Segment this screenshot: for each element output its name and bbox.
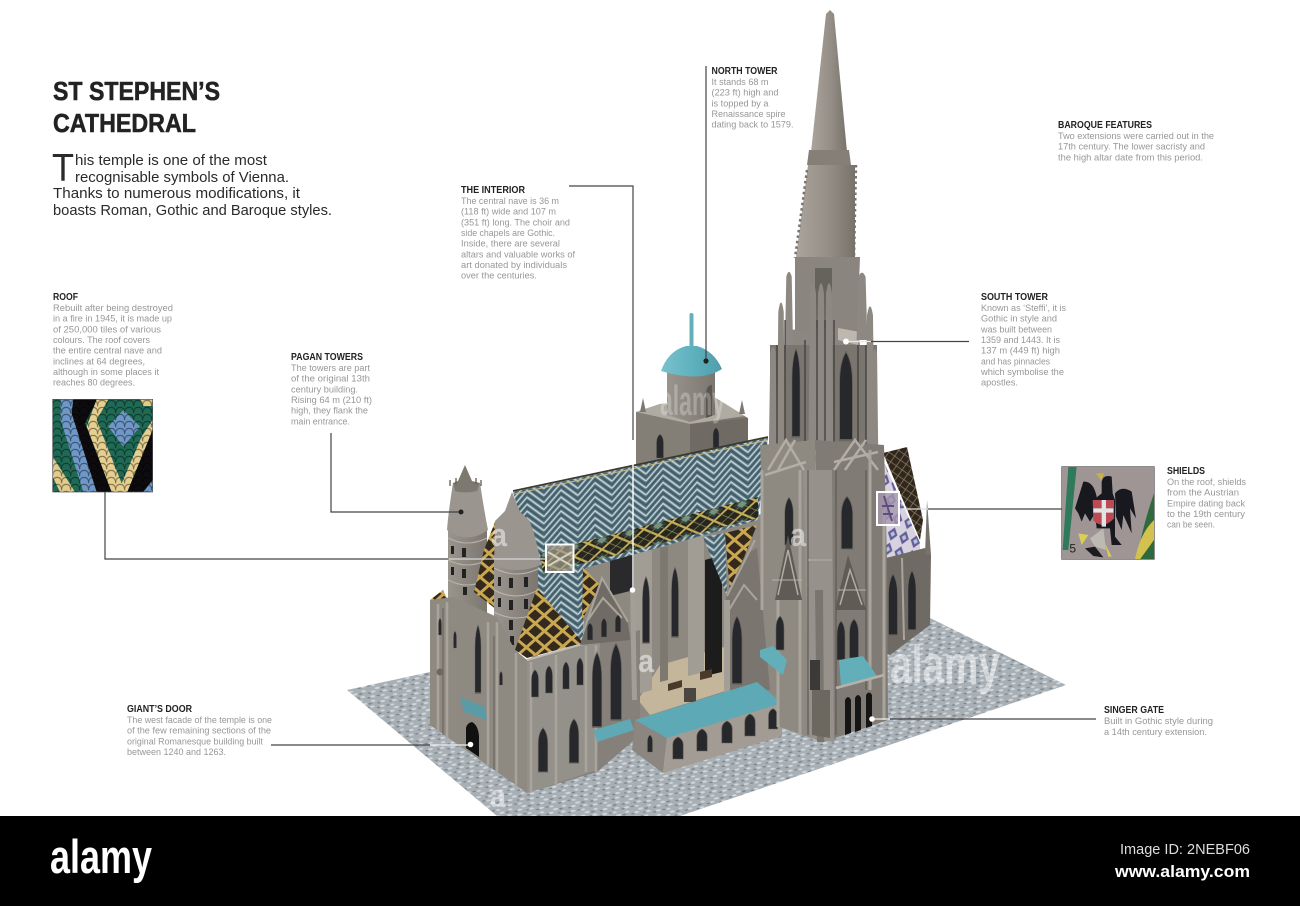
sacristy: [632, 682, 782, 773]
belfry stage: [770, 345, 877, 450]
callout: pagan towers: of the original 13th: [291, 374, 370, 385]
callout: south tower: 1359 and 1443. It is: [981, 335, 1060, 346]
callout: shields: Empire dating back: [1167, 498, 1245, 509]
footer bar: Image ID: 2NEBF06: [1120, 841, 1250, 858]
leader: roof inside building: [449, 558, 546, 560]
callout: pagan towers: [291, 352, 372, 427]
callout: north tower: is topped by a: [712, 98, 769, 109]
pagan towers: [430, 465, 541, 660]
side buttresses: [762, 450, 884, 735]
callout: pagan towers: high, they flank the: [291, 406, 368, 417]
north tower with dome: [636, 313, 748, 472]
intro text with drop cap: boasts Roman, Gothic and Baroque styles.: [53, 202, 332, 219]
callout: roof: the entire central nave and: [53, 346, 162, 357]
intro text with drop cap: [52, 147, 332, 219]
callout: singer gate: a 14th century extension.: [1104, 727, 1207, 738]
roof between towers: [474, 522, 497, 610]
roof leader line: [105, 492, 546, 559]
leader: singer gate: [869, 716, 1096, 722]
callout: roof: ROOF: [53, 292, 78, 303]
south aisle wall: [527, 630, 640, 793]
roof tile swatch: [53, 399, 153, 492]
south tower and spire: [760, 10, 888, 742]
callout: roof: reaches 80 degrees.: [53, 378, 135, 389]
callout: the interior: THE INTERIOR: [461, 185, 526, 196]
yellow lattice roof triangle: [515, 588, 583, 658]
lower tower left face: [760, 440, 823, 742]
callout: giant's door: of the few remaining sections of the: [127, 726, 271, 737]
blue side roofs: [760, 646, 787, 675]
callout: shields: SHIELDS: [1167, 466, 1205, 477]
title: CATHEDRAL: [53, 108, 196, 138]
callout: roof: of 250,000 tiles of various: [53, 324, 161, 335]
callout: roof: inclines at 64 degrees,: [53, 356, 145, 367]
callout: roof: colours. The roof covers: [53, 335, 150, 346]
callout: giant's door: original Romanesque building built: [127, 736, 263, 747]
callout: north tower: (223 ft) high and: [712, 88, 778, 99]
leader: the interior: [569, 186, 635, 593]
callout: south tower: and has pinnacles: [981, 356, 1050, 367]
upper octagon stage: [795, 257, 860, 335]
callout: pagan towers: The towers are part: [291, 363, 370, 374]
callout: north tower: It stands 68 m: [712, 77, 768, 88]
callout: north tower: [712, 66, 794, 131]
tower windows: [785, 497, 793, 545]
callout: pagan towers: PAGAN TOWERS: [291, 352, 363, 363]
callout: north tower: dating back to 1579.: [712, 120, 794, 131]
central buttress: [803, 470, 834, 742]
leader: shields: [928, 508, 1062, 510]
right side gable: [724, 540, 770, 700]
choir gable: [580, 577, 637, 700]
illustration: cathedral: [430, 10, 931, 793]
callout: the interior: Inside, there are several: [461, 239, 560, 250]
footer bar: www.alamy.com: [1114, 862, 1250, 881]
callout: baroque features: the high altar date from this period.: [1058, 152, 1203, 163]
leader: south tower: [843, 338, 969, 344]
callout: singer gate: SINGER GATE: [1104, 705, 1164, 716]
pinnacles: [769, 272, 878, 445]
callout: shields: from the Austrian: [1167, 488, 1239, 499]
callout: roof: [53, 292, 173, 389]
callout: shields: can be seen.: [1167, 520, 1215, 531]
callout: south tower: [980, 292, 1066, 389]
callout: north tower: NORTH TOWER: [712, 66, 778, 77]
callout: the interior: [461, 185, 575, 282]
white detail box: roof: [546, 544, 574, 572]
right pagan tower: [494, 492, 541, 660]
footer bar: alamy: [50, 830, 152, 883]
callout: shields: to the 19th century: [1167, 509, 1245, 520]
callout: shields: [1167, 466, 1246, 531]
callout: the interior: (118 ft) wide and 107 m: [461, 207, 556, 218]
callout: north tower: Renaissance spire: [712, 109, 786, 120]
callout: giant's door: GIANT’S DOOR: [127, 704, 193, 715]
callout: pagan towers: century building.: [291, 384, 358, 395]
callout: south tower: was built between: [980, 324, 1052, 335]
intro text with drop cap: recognisable symbols of Vienna.: [75, 169, 289, 186]
callout: the interior: The central nave is 36 m: [461, 196, 559, 207]
left pagan tower: [447, 465, 488, 625]
shield swatch: 5: [1069, 542, 1076, 556]
shield swatch: [1062, 467, 1154, 559]
watermarks: a: [490, 778, 506, 814]
west facade: [430, 597, 527, 793]
intro text with drop cap: T: [52, 147, 74, 190]
callout: roof: although in some places it: [53, 367, 159, 378]
watermarks: alamy: [890, 635, 1000, 695]
intro text with drop cap: his temple is one of the most: [75, 152, 268, 169]
watermarks: alamy: [660, 377, 725, 424]
watermarks: a: [491, 517, 507, 553]
watermarks: a: [790, 517, 806, 553]
intro text with drop cap: Thanks to numerous modifications, it: [53, 185, 301, 202]
callout: south tower: apostles.: [981, 378, 1018, 389]
ground: cobbled plaza: [347, 618, 1066, 816]
callout: the interior: altars and valuable works of: [461, 249, 575, 260]
callout: baroque features: 17th century. The lower sacristy and: [1058, 142, 1205, 153]
callout: singer gate: [1104, 705, 1213, 738]
upper gables: [765, 440, 878, 475]
callout: giant's door: The west facade of the temple is one: [127, 715, 272, 726]
watermarks: a: [638, 643, 654, 679]
callout: baroque features: Two extensions were carried out in the: [1058, 131, 1214, 142]
lower tower right face: [815, 440, 888, 742]
upper spire: [811, 10, 847, 152]
callout: the interior: art donated by individuals: [461, 260, 567, 271]
leader: giant's door: [271, 742, 473, 747]
leader: pagan towers: [331, 433, 464, 514]
callout: roof: in a fire in 1945, it is made up: [53, 314, 172, 325]
callout: baroque features: [1058, 120, 1214, 163]
tracery gables: [775, 535, 866, 610]
callout: shields: On the roof, shields: [1167, 477, 1246, 488]
callout: giant's door: between 1240 and 1263.: [127, 747, 226, 758]
callout: roof: Rebuilt after being destroyed: [53, 303, 173, 314]
callout: pagan towers: Rising 64 m (210 ft): [291, 395, 372, 406]
callout: south tower: which symbolise the: [980, 367, 1064, 378]
white detail box: shields: [877, 492, 899, 525]
callout: baroque features: BAROQUE FEATURES: [1058, 120, 1152, 131]
callout: the interior: over the centuries.: [461, 271, 537, 282]
main roof: [513, 437, 768, 645]
callout: singer gate: Built in Gothic style during: [1104, 716, 1213, 727]
callout: the interior: side chapels are Gothic.: [461, 228, 555, 239]
roof decorative band: [540, 497, 758, 574]
watermarks: [490, 377, 1000, 814]
callout: south tower: SOUTH TOWER: [981, 292, 1049, 303]
callout: south tower: Gothic in style and: [981, 314, 1057, 325]
nave interior cutaway: [583, 510, 785, 740]
callout: giant's door: [127, 704, 272, 758]
east chapel with coloured roof: [878, 447, 931, 655]
callout: south tower: 137 m (449 ft) high: [981, 346, 1060, 357]
title: [53, 76, 220, 138]
lower spire: [796, 165, 855, 257]
callout: pagan towers: main entrance.: [291, 416, 350, 427]
leader: north tower: [703, 66, 709, 364]
footer bar: [0, 816, 1300, 906]
callout: the interior: (351 ft) long. The choir and: [461, 217, 570, 228]
callout: south tower: Known as ‘Steffi’, it is: [981, 303, 1066, 314]
singer gate arches: [845, 692, 872, 735]
title: ST STEPHEN’S: [53, 76, 220, 106]
